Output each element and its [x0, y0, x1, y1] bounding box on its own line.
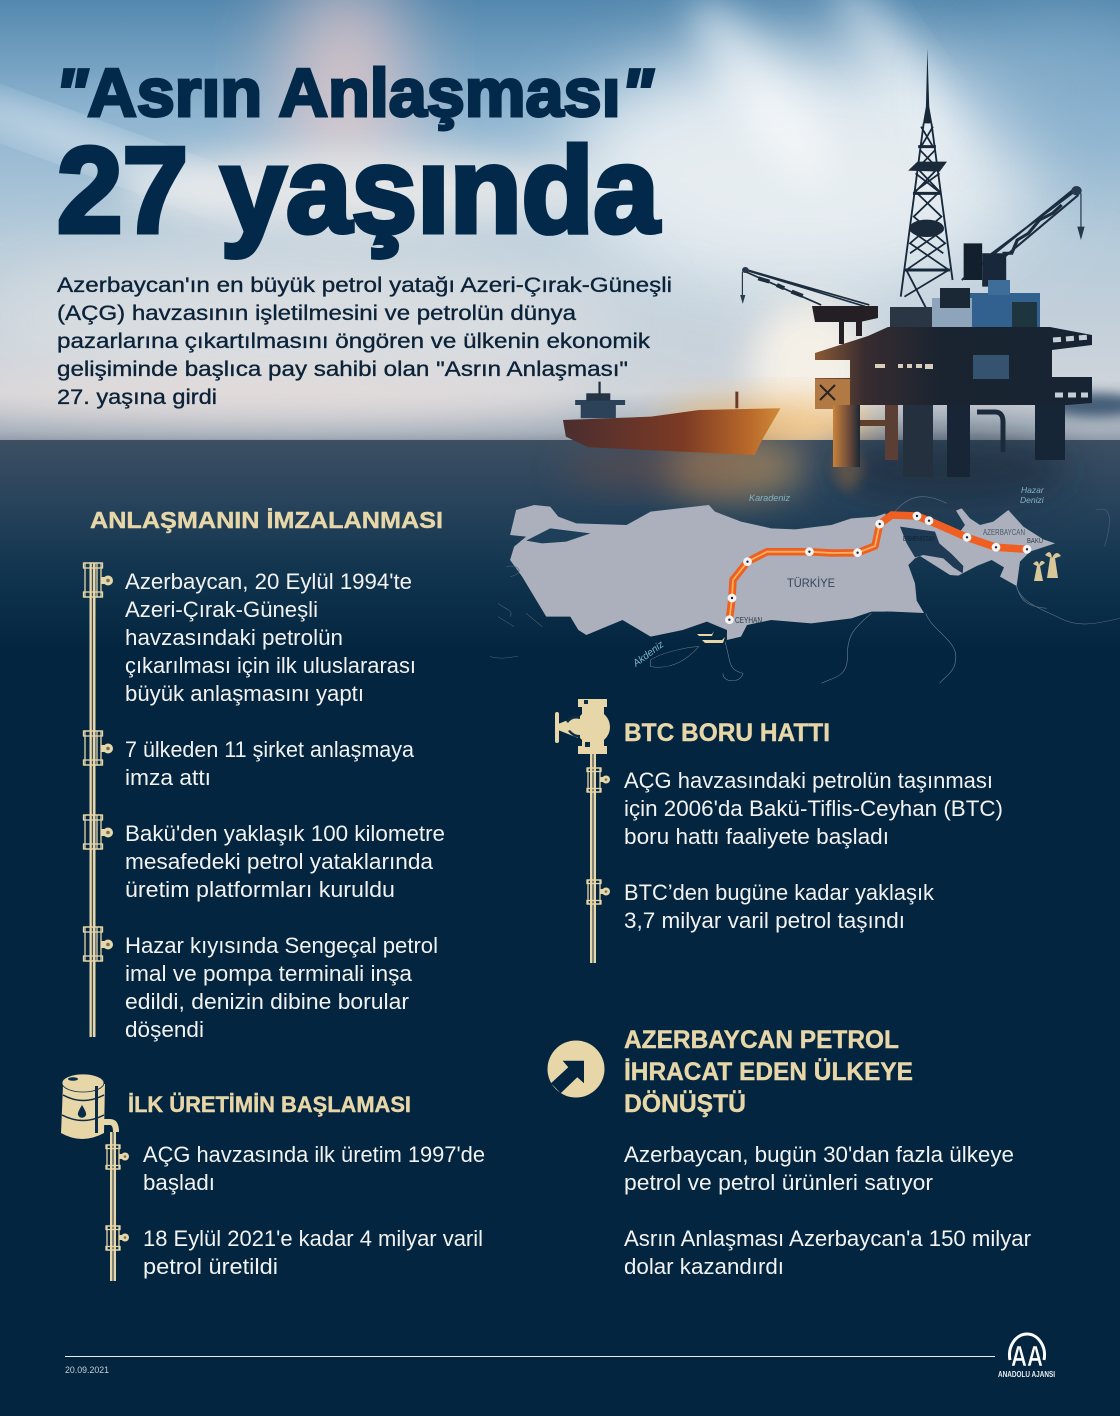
pipe timeline — [587, 754, 610, 963]
text: platforms: üretim platformları kuruldu — [125, 877, 395, 902]
map labels: Akdeniz — [630, 639, 666, 670]
map labels — [630, 485, 1045, 670]
intro paragraph: 27. yaşına girdi — [57, 386, 217, 409]
text: export countries: Azerbaycan, bugün 30'dan fazla ülkeye — [624, 1142, 1014, 1167]
icon: gate valve — [555, 699, 610, 754]
text: transported oil: 3,7 milyar varil petrol taşındı — [624, 908, 905, 933]
intro paragraph — [57, 274, 672, 409]
text: transported oil: BTC’den bugüne kadar yaklaşık — [624, 880, 935, 905]
main deck — [815, 327, 1092, 409]
text: pipeline start: için 2006'da Bakü-Tiflis-Ceyhan (BTC) — [624, 796, 1003, 821]
text: earnings: dolar kazandırdı — [624, 1254, 784, 1279]
text: companies — [125, 737, 415, 790]
icon: map tankers — [697, 631, 725, 643]
map land — [490, 497, 1120, 683]
heading: AZERBAYCAN PETROL — [624, 1026, 899, 1054]
text: earnings: Asrın Anlaşması Azerbaycan'a 150 milyar — [624, 1226, 1031, 1251]
panel: btc boru hattı — [555, 699, 1003, 963]
icon: oil barrel — [61, 1074, 116, 1139]
intro paragraph: (AÇG) havzasının işletilmesini ve petrolün dünya — [57, 302, 576, 325]
panel: ilk üretimin başlaması — [61, 1074, 485, 1281]
text: signing: büyük anlaşmasını yaptı — [125, 681, 364, 706]
text: signing: çıkarılması için ilk uluslararası — [125, 653, 416, 678]
intro paragraph: gelişiminde başlıca pay sahibi olan "Asrın Anlaşması" — [57, 358, 628, 381]
map labels: Denizi — [1020, 495, 1045, 505]
heading: ANLAŞMANIN İMZALANMASI — [90, 507, 443, 533]
text: signing — [125, 569, 416, 706]
heading: BTC BORU HATTI — [624, 719, 830, 747]
logo: Anadolu Ajansı — [998, 1334, 1055, 1379]
intro paragraph: pazarlarına çıkartılmasını öngören ve ülkenin ekonomik — [57, 330, 651, 353]
text: terminal: Hazar kıyısında Sengeçal petrol — [125, 933, 438, 958]
text: export countries — [624, 1142, 1014, 1195]
text: terminal — [125, 933, 438, 1042]
text: pipeline start: boru hattı faaliyete başladı — [624, 824, 889, 849]
icon: export arrow — [548, 1040, 604, 1098]
heading — [624, 1026, 913, 1118]
text: signing: Azerbaycan, 20 Eylül 1994'te — [125, 569, 412, 594]
text: production total: 18 Eylül 2021'e kadar 4 milyar varil — [143, 1226, 483, 1251]
map labels: Karadeniz — [749, 493, 791, 503]
text: terminal: edildi, denizin dibine borular — [125, 989, 409, 1014]
text: companies: 7 ülkeden 11 şirket anlaşmaya — [125, 737, 415, 762]
text: export countries: petrol ve petrol ürünleri satıyor — [624, 1170, 933, 1195]
map labels: CEYHAN — [735, 616, 762, 625]
text: first production: başladı — [143, 1170, 215, 1195]
map labels: TÜRKİYE — [787, 576, 835, 590]
pipe timeline — [84, 563, 113, 1037]
map: BTC pipeline route — [490, 485, 1120, 683]
derrick and cranes — [740, 48, 1085, 320]
title: "Asrın Anlaşması" — [55, 55, 654, 131]
logo: Anadolu Ajansı: ANADOLU AJANSI — [998, 1370, 1055, 1379]
panel: anlaşmanın imzalanması — [84, 507, 445, 1042]
text: platforms: Bakü'den yaklaşık 100 kilometre — [125, 821, 445, 846]
photo: oil rig — [740, 48, 1092, 477]
text: signing: havzasındaki petrolün — [125, 625, 343, 650]
text: platforms: mesafedeki petrol yataklarında — [125, 849, 434, 874]
text: companies: imza attı — [125, 765, 211, 790]
pipeline — [729, 515, 1027, 620]
text: platforms — [125, 821, 445, 902]
text: first production — [143, 1142, 485, 1195]
left crane platform — [812, 306, 878, 344]
pipe timeline — [106, 1132, 129, 1281]
photo: tanker ship — [563, 382, 780, 455]
title — [55, 55, 660, 258]
text: signing: Azeri-Çırak-Güneşli — [125, 597, 318, 622]
intro paragraph: Azerbaycan'ın en büyük petrol yatağı Azeri-Çırak-Güneşli — [57, 274, 672, 297]
date: 20.09.2021 — [65, 1365, 109, 1375]
text: terminal: imal ve pompa terminali inşa — [125, 961, 413, 986]
text: production total: petrol üretildi — [143, 1254, 278, 1279]
text: transported oil — [624, 880, 935, 933]
text: pipeline start: AÇG havzasındaki petrolün taşınması — [624, 768, 993, 793]
text: earnings — [624, 1226, 1031, 1279]
icon: map oil rigs — [1033, 552, 1061, 581]
title: 27 yaşında — [57, 122, 660, 258]
map labels: AZERBAYCAN — [983, 528, 1025, 537]
heading: İHRACAT EDEN ÜLKEYE — [624, 1057, 913, 1086]
logo: Anadolu Ajansı: AA — [1011, 1341, 1043, 1373]
pipeline stations — [727, 513, 1030, 622]
heading: DÖNÜŞTÜ — [624, 1089, 746, 1118]
map labels: Hazar — [1021, 485, 1045, 495]
legs — [833, 405, 1065, 477]
machinery block — [890, 280, 1040, 329]
text: terminal: döşendi — [125, 1017, 204, 1042]
map labels: BAKÜ — [1027, 537, 1043, 545]
text: first production: AÇG havzasında ilk üretim 1997'de — [143, 1142, 485, 1167]
text: pipeline start — [624, 768, 1003, 849]
footer rule — [65, 1356, 995, 1357]
panel: azerbaycan petrol ihracat — [548, 1026, 1031, 1279]
text: production total — [143, 1226, 483, 1279]
map labels: ERMENİSTAN — [903, 534, 935, 543]
heading: İLK ÜRETİMİN BAŞLAMASI — [128, 1092, 411, 1117]
